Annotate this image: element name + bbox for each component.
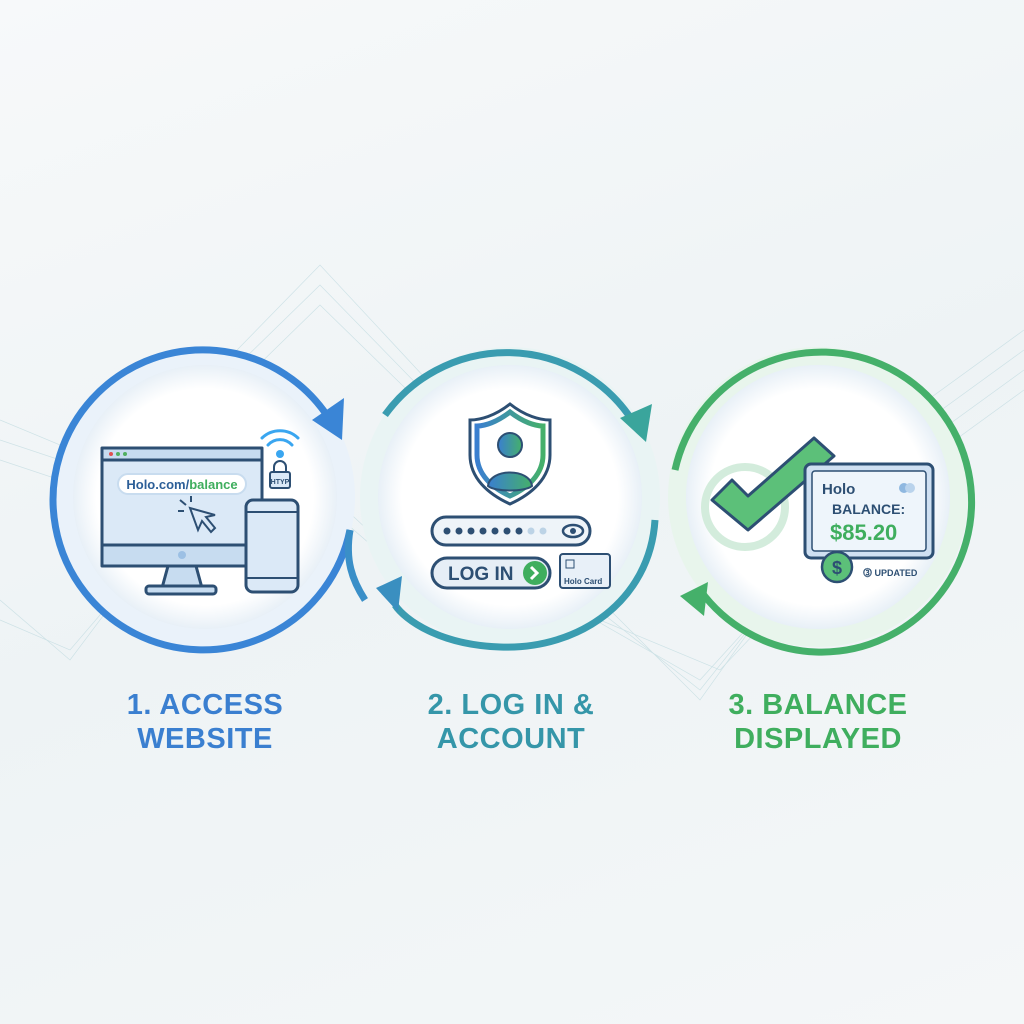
label: step 1: 1. ACCESS <box>127 689 283 721</box>
icon: wifi + lock <box>262 431 298 445</box>
label: step 3: DISPLAYED <box>734 723 902 755</box>
step 3 circle: BALANCE: <box>832 501 905 517</box>
step 1 circle: Holo.com/balance <box>126 477 238 492</box>
arrow back <box>376 576 402 612</box>
step 2 circle: LOG IN <box>448 564 513 585</box>
icon: check <box>705 467 785 547</box>
label: step 2 <box>428 689 594 755</box>
arrow 2 <box>620 404 652 442</box>
arrow 3 back <box>680 582 708 616</box>
label: step 1 <box>127 689 283 755</box>
step 3 circle: $ <box>832 558 842 578</box>
step 1 circle: HTYP <box>271 479 290 486</box>
step 3 circle: $85.20 <box>830 520 897 545</box>
label: step 2: 2. LOG IN & <box>428 689 594 721</box>
step 3 circle <box>668 347 972 652</box>
icon: phone <box>246 500 298 592</box>
icon: cursor <box>190 508 215 532</box>
label: step 3 <box>728 689 908 755</box>
step 3 circle: Holo <box>822 481 855 498</box>
password field <box>432 517 590 545</box>
label: step 3: 3. BALANCE <box>728 689 908 721</box>
icon: coin <box>822 552 852 582</box>
arrow 1 <box>312 398 344 440</box>
icon: shield <box>470 404 550 504</box>
step 2 circle: Holo Card <box>564 577 602 586</box>
step 3 circle: ⓷ UPDATED <box>863 567 918 578</box>
step 2 circle <box>360 347 660 647</box>
step 1 circle <box>53 347 365 650</box>
label: step 1: WEBSITE <box>137 723 273 755</box>
balance card <box>805 464 933 558</box>
icon: monitor <box>102 448 262 594</box>
login button <box>432 558 550 588</box>
label: step 2: ACCOUNT <box>437 723 585 755</box>
holo card <box>560 554 610 588</box>
